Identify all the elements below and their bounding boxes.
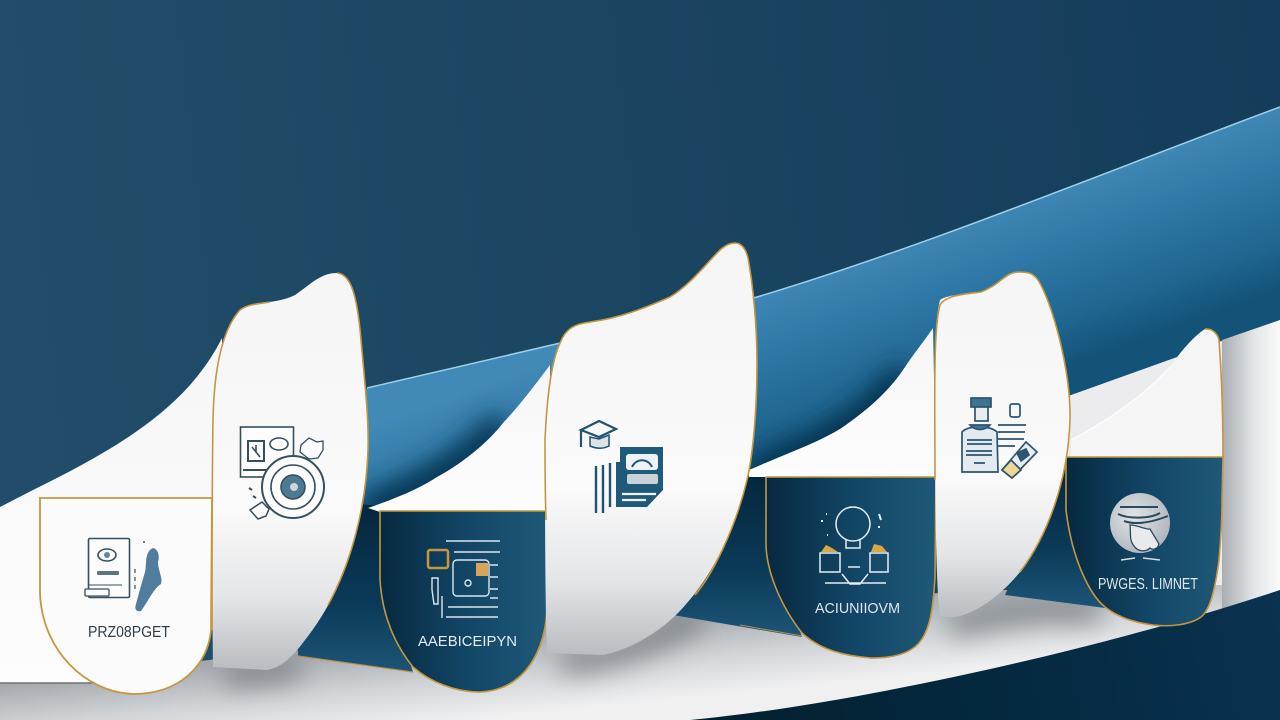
white sweep <box>368 365 550 512</box>
gold card edge <box>935 272 1070 572</box>
tall white card <box>545 243 757 655</box>
icon: document and person <box>85 538 161 611</box>
gold base line <box>740 625 802 636</box>
label: ACIUNIIOVM <box>815 600 900 617</box>
lower tab <box>1066 457 1223 626</box>
label: PWGES. LIMNET <box>1098 576 1198 593</box>
gold base line <box>298 656 413 672</box>
panel: step 3 <box>673 272 1070 658</box>
white sweep <box>749 328 936 477</box>
icon: screen and target <box>240 427 324 519</box>
icon: man with hat <box>1110 493 1170 560</box>
gold outer edge <box>1205 329 1223 457</box>
white right band <box>1000 320 1280 640</box>
label: AAEBICEIPYN <box>418 633 517 650</box>
tall white card <box>212 273 368 670</box>
dark strip behind step 4 <box>1005 460 1105 608</box>
dark strip behind step 3 <box>673 470 802 637</box>
white sweep <box>0 338 222 683</box>
lower tab <box>766 477 936 658</box>
right band shading <box>1222 320 1280 612</box>
dark lower right corner <box>690 590 1280 720</box>
lower tab <box>40 498 212 694</box>
panel: step 1 <box>0 273 368 694</box>
ground surface <box>0 585 1280 720</box>
gold card edge <box>545 243 757 595</box>
icon: application form <box>428 541 500 618</box>
shadow under sweeps on the band <box>362 373 905 512</box>
shadow line at left base <box>0 682 92 684</box>
dark strip behind step 2 <box>298 500 413 672</box>
upper white shape <box>1071 329 1223 457</box>
tall white card <box>935 272 1070 617</box>
icon: head and baskets <box>820 507 888 584</box>
gold card edge <box>212 273 368 630</box>
card shadows on ground <box>225 610 1100 676</box>
icon: graduation cap and document <box>581 421 663 513</box>
icon: worker with documents <box>962 398 1037 478</box>
blue diagonal band <box>340 107 1280 530</box>
panel: step 4 <box>1005 329 1223 626</box>
panel: step 2 <box>298 243 757 692</box>
lower tab <box>380 511 547 692</box>
edge line <box>1071 367 1170 440</box>
label: PRZ08PGET <box>88 624 170 641</box>
